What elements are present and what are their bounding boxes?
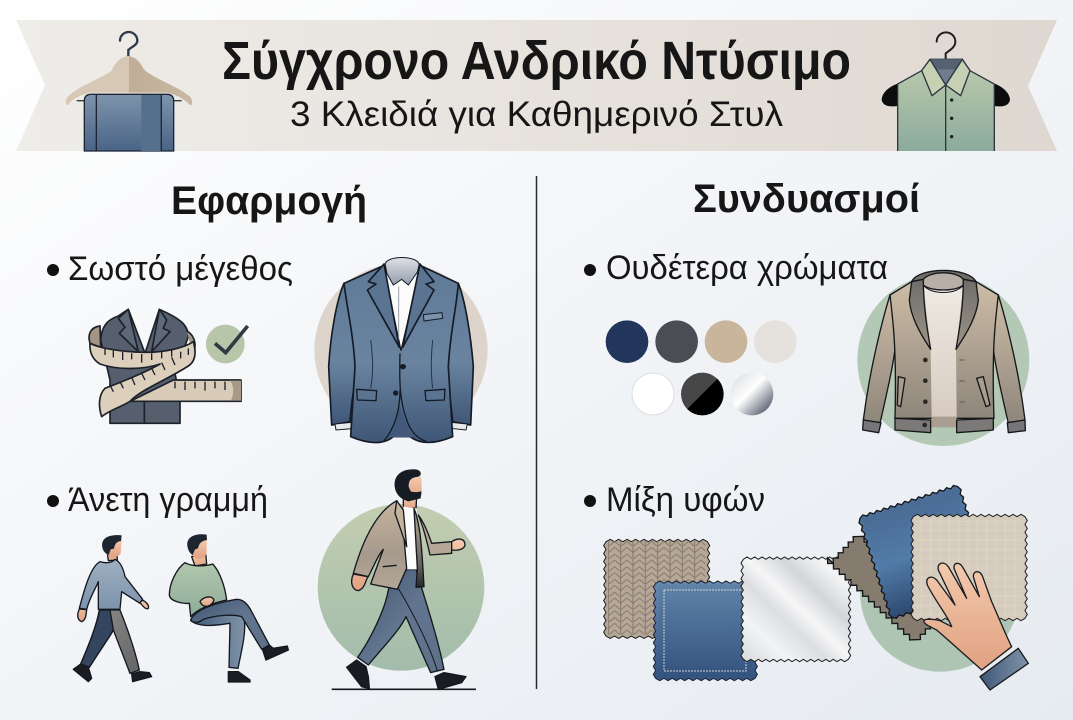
bullet: comfortable line: Άνετη γραμμή bbox=[68, 481, 268, 519]
illustration: walking man bbox=[73, 535, 152, 682]
heading: fit: Εφαρμογή bbox=[171, 179, 367, 223]
panel: combinations bbox=[584, 177, 1029, 690]
colour swatches bbox=[606, 320, 797, 415]
illustration: striding man on circle bbox=[318, 469, 484, 689]
swatch: blue denim bbox=[857, 484, 993, 620]
illustration: fabric swatches row bbox=[604, 539, 851, 681]
ribbon shape bbox=[16, 20, 1057, 151]
bullet: neutral colours: Ουδέτερα χρώματα bbox=[606, 249, 888, 287]
icon: hanger with shirt bbox=[882, 32, 1010, 151]
illustration: seated man bbox=[169, 534, 288, 682]
swatch: taupe tweed bbox=[825, 528, 946, 645]
swatch: linen bbox=[911, 514, 1027, 621]
swatch: denim bbox=[653, 581, 757, 681]
swatch: silk bbox=[741, 557, 851, 662]
subtitle: 3 Κλειδιά για Καθημερινό Στυλ bbox=[290, 95, 784, 134]
swatch: knit bbox=[604, 539, 710, 638]
illustration: blazer bbox=[314, 257, 488, 443]
title banner bbox=[16, 20, 1057, 151]
heading: combinations: Συνδυασμοί bbox=[693, 177, 920, 221]
divider bbox=[536, 176, 538, 689]
icon: hand bbox=[924, 563, 1028, 690]
green circle bbox=[860, 512, 1020, 672]
icon: tape measure around jacket bbox=[89, 309, 241, 423]
bullet: fabric mix: Μίξη υφών bbox=[606, 481, 765, 519]
title: Σύγχρονο Ανδρικό Ντύσιμο bbox=[222, 31, 851, 91]
illustration: cardigan bbox=[857, 270, 1029, 446]
icon: green check badge bbox=[206, 325, 248, 363]
bullet: correct size: Σωστό μέγεθος bbox=[68, 250, 293, 288]
icon: hanger with trousers bbox=[66, 32, 192, 151]
illustration: fabric stack with hand bbox=[825, 484, 1028, 690]
panel: fit bbox=[47, 179, 488, 689]
